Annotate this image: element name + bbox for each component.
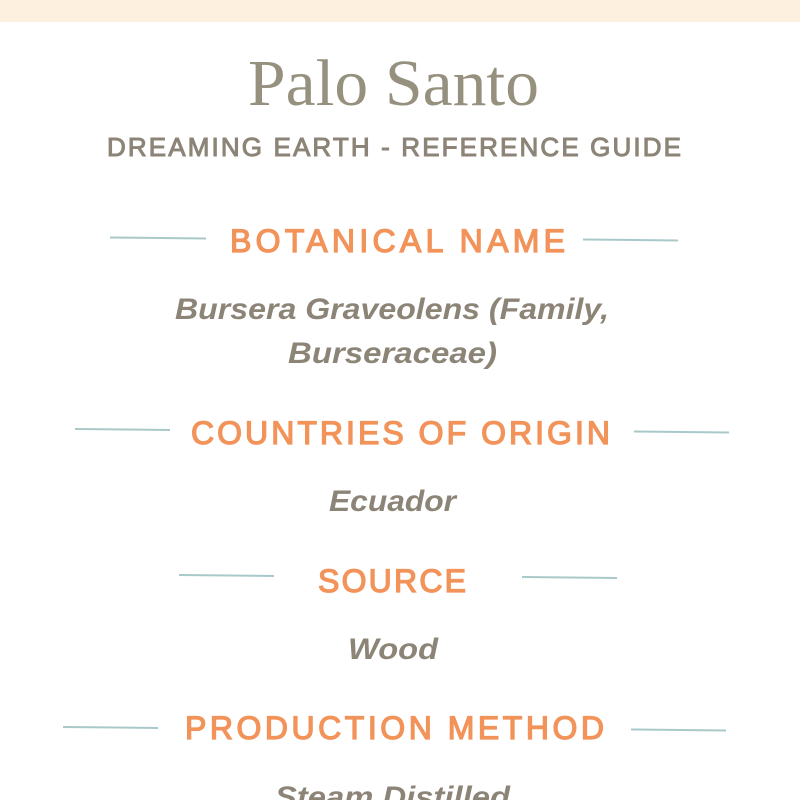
top cream band [0, 0, 800, 22]
section: source [179, 563, 617, 666]
title: Palo Santo [248, 47, 539, 120]
value: source: Wood [348, 633, 439, 666]
heading: countries of origin: COUNTRIES OF ORIGIN [191, 415, 610, 451]
section: production method [63, 710, 726, 800]
subtitle: DREAMING EARTH - REFERENCE GUIDE [107, 132, 681, 162]
value: botanical name: Bursera Graveolens (Family, [175, 293, 609, 326]
value: countries of origin: Ecuador [329, 485, 458, 518]
section: botanical name [110, 223, 678, 370]
section: botanical name: Burseraceae) [288, 337, 497, 370]
heading: production method: PRODUCTION METHOD [185, 710, 604, 746]
heading: botanical name: BOTANICAL NAME [230, 223, 565, 259]
heading: source: SOURCE [318, 563, 466, 599]
section: countries of origin [75, 415, 729, 518]
